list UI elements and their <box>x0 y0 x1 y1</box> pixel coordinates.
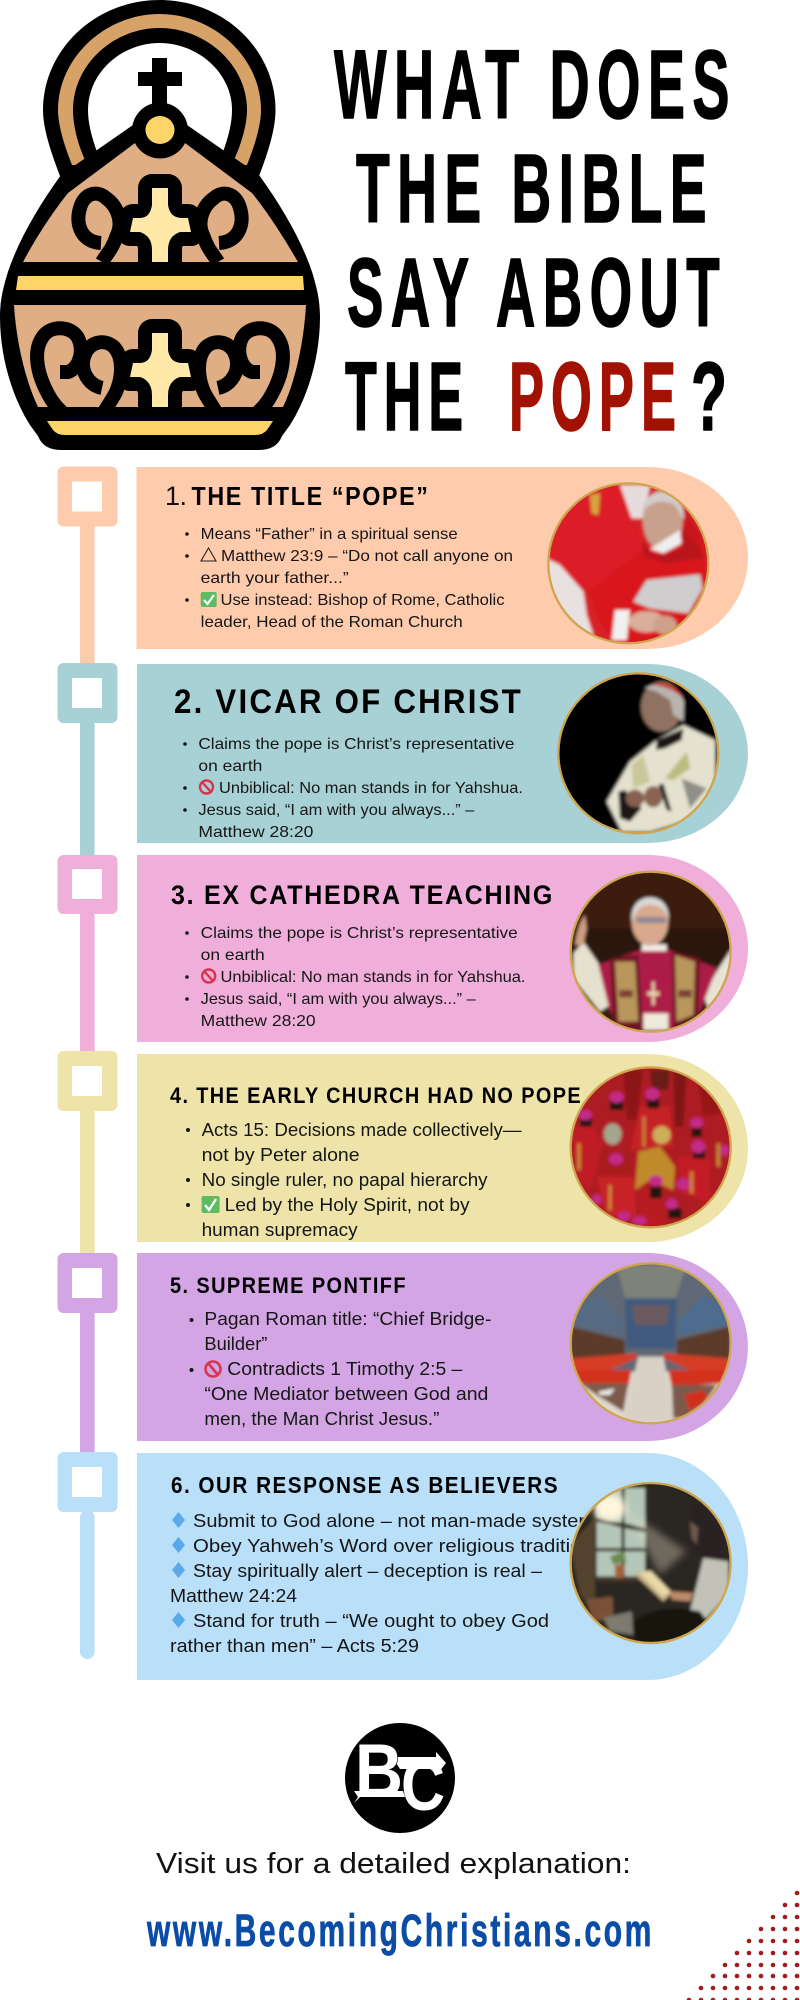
heading: the title pope: THE TITLE “POPE” <box>192 481 430 511</box>
bullet list: ex cathedra teaching: Unbiblical: No man stands in for Yahshua. <box>220 969 526 986</box>
panel: the title pope <box>136 467 748 655</box>
bullet list: ex cathedra teaching <box>185 925 525 1030</box>
bullet list: vicar of christ: Unbiblical: No man stands in for Yahshua. <box>219 780 523 797</box>
bullet list: supreme pontiff: “One Mediator between God and <box>204 1384 488 1404</box>
heading: vicar of christ: 2. VICAR OF CHRIST <box>174 683 523 721</box>
bullet list: vicar of christ: on earth <box>198 758 262 775</box>
bullet list: vicar of christ: Claims the pope is Christ’s representative <box>198 736 515 753</box>
heading: the title pope: 1. <box>165 481 187 511</box>
bullet list: the early church had no pope: not by Peter alone <box>202 1145 360 1165</box>
bullet list: the title pope: earth your father...” <box>201 570 349 587</box>
bullet list: the early church had no pope: human supremacy <box>202 1220 358 1240</box>
panel: supreme pontiff <box>137 1253 748 1441</box>
logo: becoming christians: C <box>401 1746 445 1826</box>
bullet list: the title pope: Use instead: Bishop of Rome, Catholic <box>220 592 504 609</box>
bullet list: vicar of christ <box>183 736 523 841</box>
logo: becoming christians: B <box>355 1729 403 1814</box>
bullet list: our response as believers: rather than men” – Acts 5:29 <box>170 1636 419 1656</box>
bullet list: the title pope: leader, Head of the Roman Church <box>201 614 463 631</box>
heading: supreme pontiff: 5. SUPREME PONTIFF <box>170 1273 407 1298</box>
bullet list: our response as believers: Obey Yahweh’s Word over religious traditions <box>193 1536 603 1556</box>
title: ? <box>691 342 727 451</box>
photo: cardinal in red <box>547 482 710 644</box>
icon: papal tiara <box>0 0 320 450</box>
title: THE <box>345 342 470 451</box>
bullet list: our response as believers: Stay spiritually alert – deception is real – <box>193 1561 542 1581</box>
heading: ex cathedra teaching: 3. EX CATHEDRA TEACHING <box>171 880 554 910</box>
bullet list: supreme pontiff: Contradicts 1 Timothy 2:5 – <box>227 1359 462 1379</box>
heading: our response as believers: 6. OUR RESPONSE AS BELIEVERS <box>171 1472 559 1498</box>
bullet list: the title pope: Means “Father” in a spiritual sense <box>201 526 458 543</box>
bullet list: the early church had no pope: No single ruler, no papal hierarchy <box>202 1170 488 1190</box>
logo: becoming christians <box>345 1723 455 1833</box>
bullet list: ex cathedra teaching: Matthew 28:20 <box>201 1013 316 1030</box>
photo: bishops in red <box>570 1066 732 1228</box>
panel: ex cathedra teaching <box>137 855 748 1045</box>
bullet list: the title pope: Matthew 23:9 – “Do not call anyone on <box>221 548 513 565</box>
bullet list: the early church had no pope <box>186 1120 522 1240</box>
photo: man reading by window <box>570 1482 732 1644</box>
bullet list: the title pope <box>185 526 513 631</box>
bullet list: ex cathedra teaching: Jesus said, “I am with you always...” – <box>201 991 476 1008</box>
bullet list: the early church had no pope: Acts 15: Decisions made collectively— <box>202 1120 522 1140</box>
bullet list: supreme pontiff: men, the Man Christ Jesus.” <box>204 1409 439 1429</box>
bullet list: supreme pontiff: Builder” <box>204 1334 267 1354</box>
photo: pope waving <box>570 870 732 1033</box>
bullet list: vicar of christ: Matthew 28:20 <box>198 824 314 841</box>
text: visit us: Visit us for a detailed explanation: <box>156 1848 631 1880</box>
decorative dot triangle <box>687 1891 799 2000</box>
bullet list: the early church had no pope: Led by the Holy Spirit, not by <box>225 1195 470 1215</box>
panel: our response as believers <box>137 1453 748 1680</box>
bullet list: our response as believers: Stand for truth – “We ought to obey God <box>193 1611 549 1631</box>
bullet list: supreme pontiff <box>190 1309 491 1429</box>
heading: the early church had no pope: 4. THE EARLY CHURCH HAD NO POPE <box>170 1083 582 1108</box>
title <box>334 30 737 451</box>
bullet list: ex cathedra teaching: on earth <box>201 947 265 964</box>
bullet list: our response as believers: Submit to God alone – not man-made systems <box>193 1511 605 1531</box>
bullet list: supreme pontiff: Pagan Roman title: “Chief Bridge- <box>204 1309 491 1329</box>
bullet list: our response as believers: Matthew 24:24 <box>170 1586 297 1606</box>
photo: sistine chapel conclave <box>570 1262 732 1424</box>
bullet list: vicar of christ: Jesus said, “I am with you always...” – <box>198 802 474 819</box>
timeline spine <box>58 466 118 1659</box>
panel: vicar of christ <box>137 664 748 845</box>
bullet list: ex cathedra teaching: Claims the pope is Christ’s representative <box>201 925 518 942</box>
panel: the early church had no pope <box>137 1054 748 1242</box>
photo: cleric in white vestment <box>557 672 720 834</box>
bullet list: our response as believers <box>170 1511 605 1656</box>
